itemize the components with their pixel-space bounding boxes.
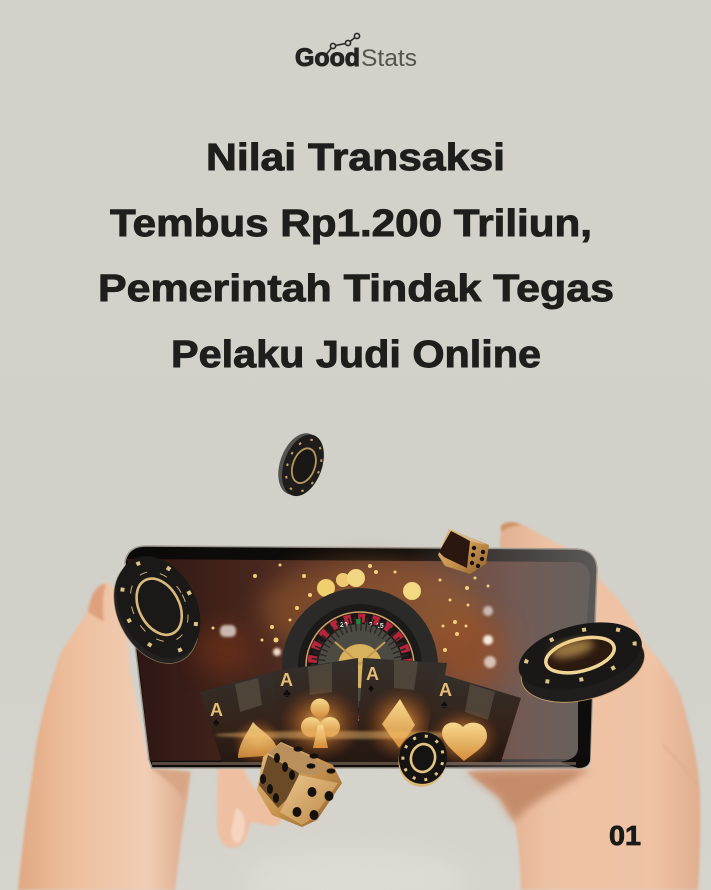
logo: GoodStats: Good <box>295 44 360 72</box>
playing card: club <box>272 658 362 762</box>
title: Pemerintah Tindak Tegas <box>98 268 614 310</box>
phone body <box>125 546 597 768</box>
right hand <box>467 522 700 890</box>
bokeh lights <box>212 564 490 652</box>
title: Tembus Rp1.200 Triliun, <box>110 203 592 245</box>
logo: GoodStats <box>295 33 417 72</box>
roulette wheel: 15 <box>376 623 384 630</box>
roulette wheel <box>282 588 438 744</box>
title: Nilai Transaksi <box>206 137 505 179</box>
playing card: club: ♣ <box>283 686 291 700</box>
roulette wheel: 12 <box>365 622 373 629</box>
title: Pelaku Judi Online <box>171 334 541 376</box>
right bezel shadow <box>560 690 592 768</box>
fingers under the phone <box>217 768 281 848</box>
playing card: heart: A <box>439 680 452 700</box>
playing card: club: A <box>280 670 293 690</box>
playing card: diamond: A <box>366 664 379 684</box>
playing card: spade <box>200 672 285 766</box>
icon: top dice <box>438 529 489 574</box>
playing card: diamond: ♦ <box>368 681 374 695</box>
playing card: heart: ♠ <box>441 697 448 711</box>
phone screen <box>127 559 590 761</box>
logo: GoodStats: Stats <box>361 45 417 72</box>
screen reflection <box>152 762 576 765</box>
wall shadow <box>245 850 465 890</box>
icon: small casino chip <box>393 728 452 791</box>
icon: floating casino chip <box>270 427 332 502</box>
roulette wheel: 20 <box>340 622 348 629</box>
icon: left casino chip <box>96 542 219 678</box>
playing card: diamond <box>356 658 447 762</box>
playing card: heart <box>422 673 521 768</box>
page number: 01 <box>609 820 641 851</box>
title <box>98 137 614 376</box>
playing card: spade: A <box>210 700 223 720</box>
screen glow <box>195 560 508 690</box>
playing card: spade: ♠ <box>213 715 220 729</box>
left hand <box>18 583 190 890</box>
phone <box>125 546 597 768</box>
icon: right casino chip <box>512 611 652 714</box>
lens flare band <box>215 731 475 739</box>
icon: large dice <box>257 742 342 827</box>
